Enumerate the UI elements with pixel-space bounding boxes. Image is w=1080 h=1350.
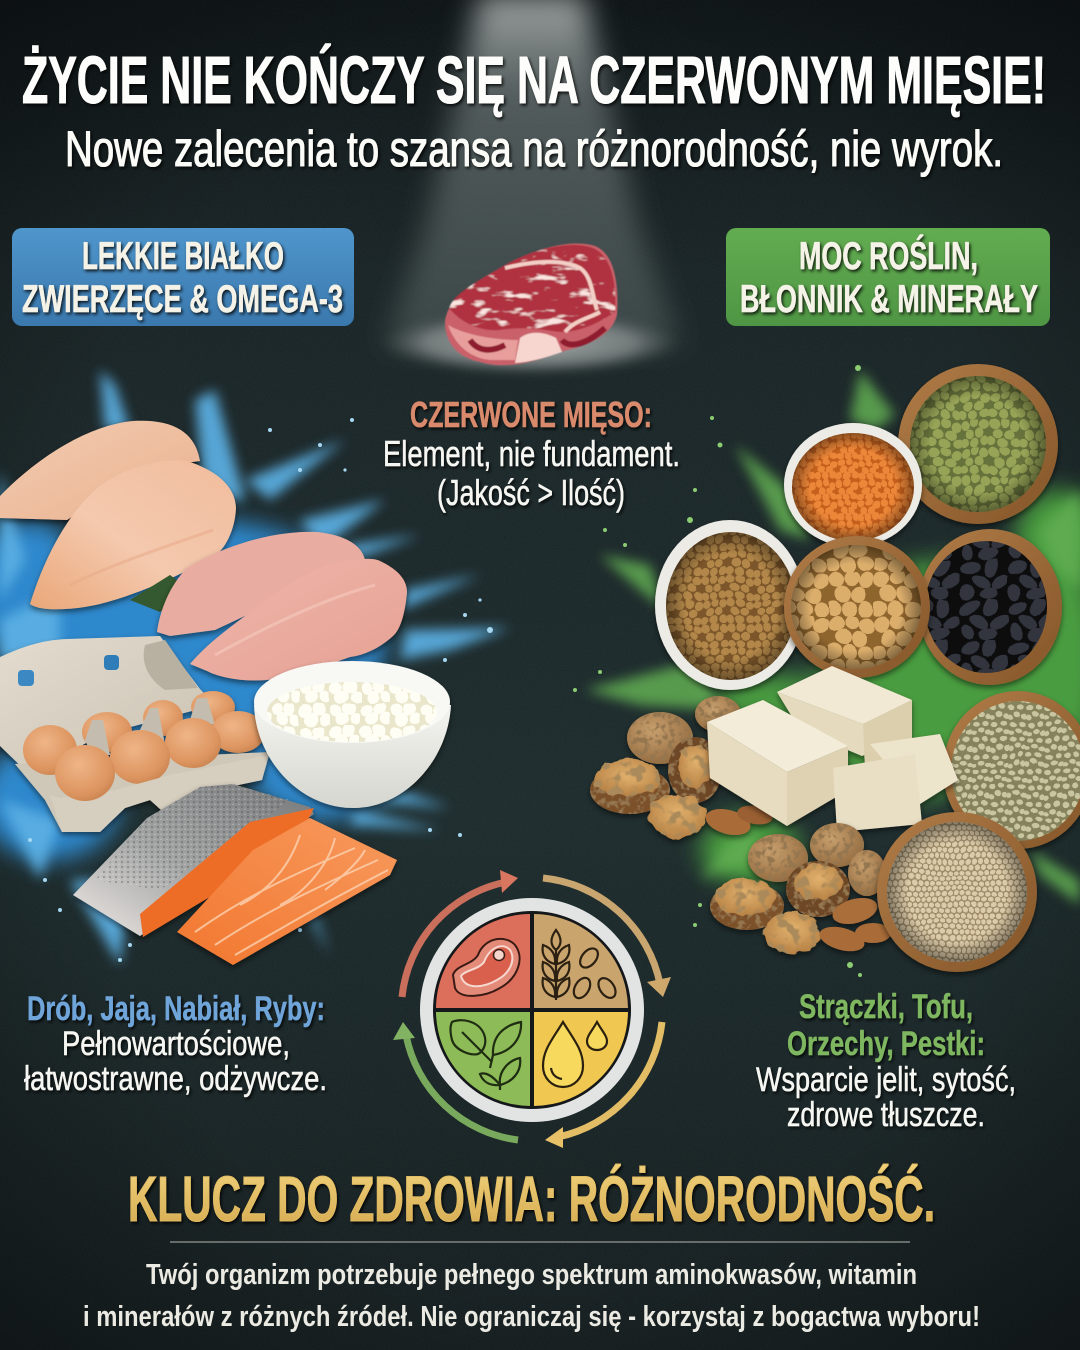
herb sprig [130,575,190,612]
arrow: yellow [545,1022,662,1148]
label: animal protein: LEKKIE BIAŁKO [82,235,284,278]
label: animal protein [12,228,354,326]
bowl: quinoa [877,812,1037,972]
walnuts and almonds, upper group [590,696,774,840]
bowl: green lentils [898,364,1058,524]
bowl: red lentils [782,423,924,551]
arrow: tan [543,878,671,997]
closing text: Twój organizm potrzebuje pełnego spektrum aminokwasów, witamin [146,1259,917,1291]
caption: plant foods: Orzechy, Pestki: [787,1025,985,1063]
caption: plant foods: zdrowe tłuszcze. [787,1096,985,1134]
arrow: red [402,870,518,997]
caption: animal foods: łatwostrawne, odżywcze. [24,1060,327,1098]
arrow: green [393,1022,518,1140]
spotlight beam [380,0,680,374]
tofu blocks [707,666,958,832]
caption: red meat [383,394,680,513]
bowl: hemp seeds [940,690,1080,852]
closing text [83,1259,980,1333]
green powder burst [573,365,1080,977]
caption: animal foods: Drób, Jaja, Nabiał, Ryby: [27,990,325,1028]
caption: animal foods: Pełnowartościowe, [62,1025,290,1063]
caption: red meat: (Jakość > Ilość) [437,472,625,513]
caption: animal foods [24,990,327,1098]
raw steak [445,243,617,365]
caption: red meat: CZERWONE MIĘSO: [410,394,652,435]
caption: plant foods: Strączki, Tofu, [799,988,973,1026]
caption: plant foods [756,988,1016,1134]
plate sector: meat [436,914,530,1008]
plate sector: grains [534,914,628,1008]
plate sector: fats [534,1012,628,1106]
blue powder burst [0,370,510,965]
egg carton with eggs [0,636,270,832]
plate icon [420,898,644,1122]
label: plant power [726,228,1050,326]
caption: red meat: Element, nie fundament. [383,433,680,474]
label: plant power: MOC ROŚLIN, [799,234,978,278]
label: animal protein: ZWIERZĘCE & OMEGA-3 [22,278,343,321]
plate sector: vegetables [436,1012,530,1106]
salmon fillets [73,784,397,965]
bowl of cottage cheese [254,661,451,808]
bowl: brown lentils [655,520,806,690]
walnuts and almonds, lower group [710,823,891,956]
cycle arrows [393,870,671,1148]
turkey breasts [157,532,407,681]
chicken breasts [0,421,236,609]
bowl: black beans [915,529,1062,685]
caption: plant foods: Wsparcie jelit, sytość, [756,1061,1016,1099]
bowl: chickpeas [781,535,931,679]
